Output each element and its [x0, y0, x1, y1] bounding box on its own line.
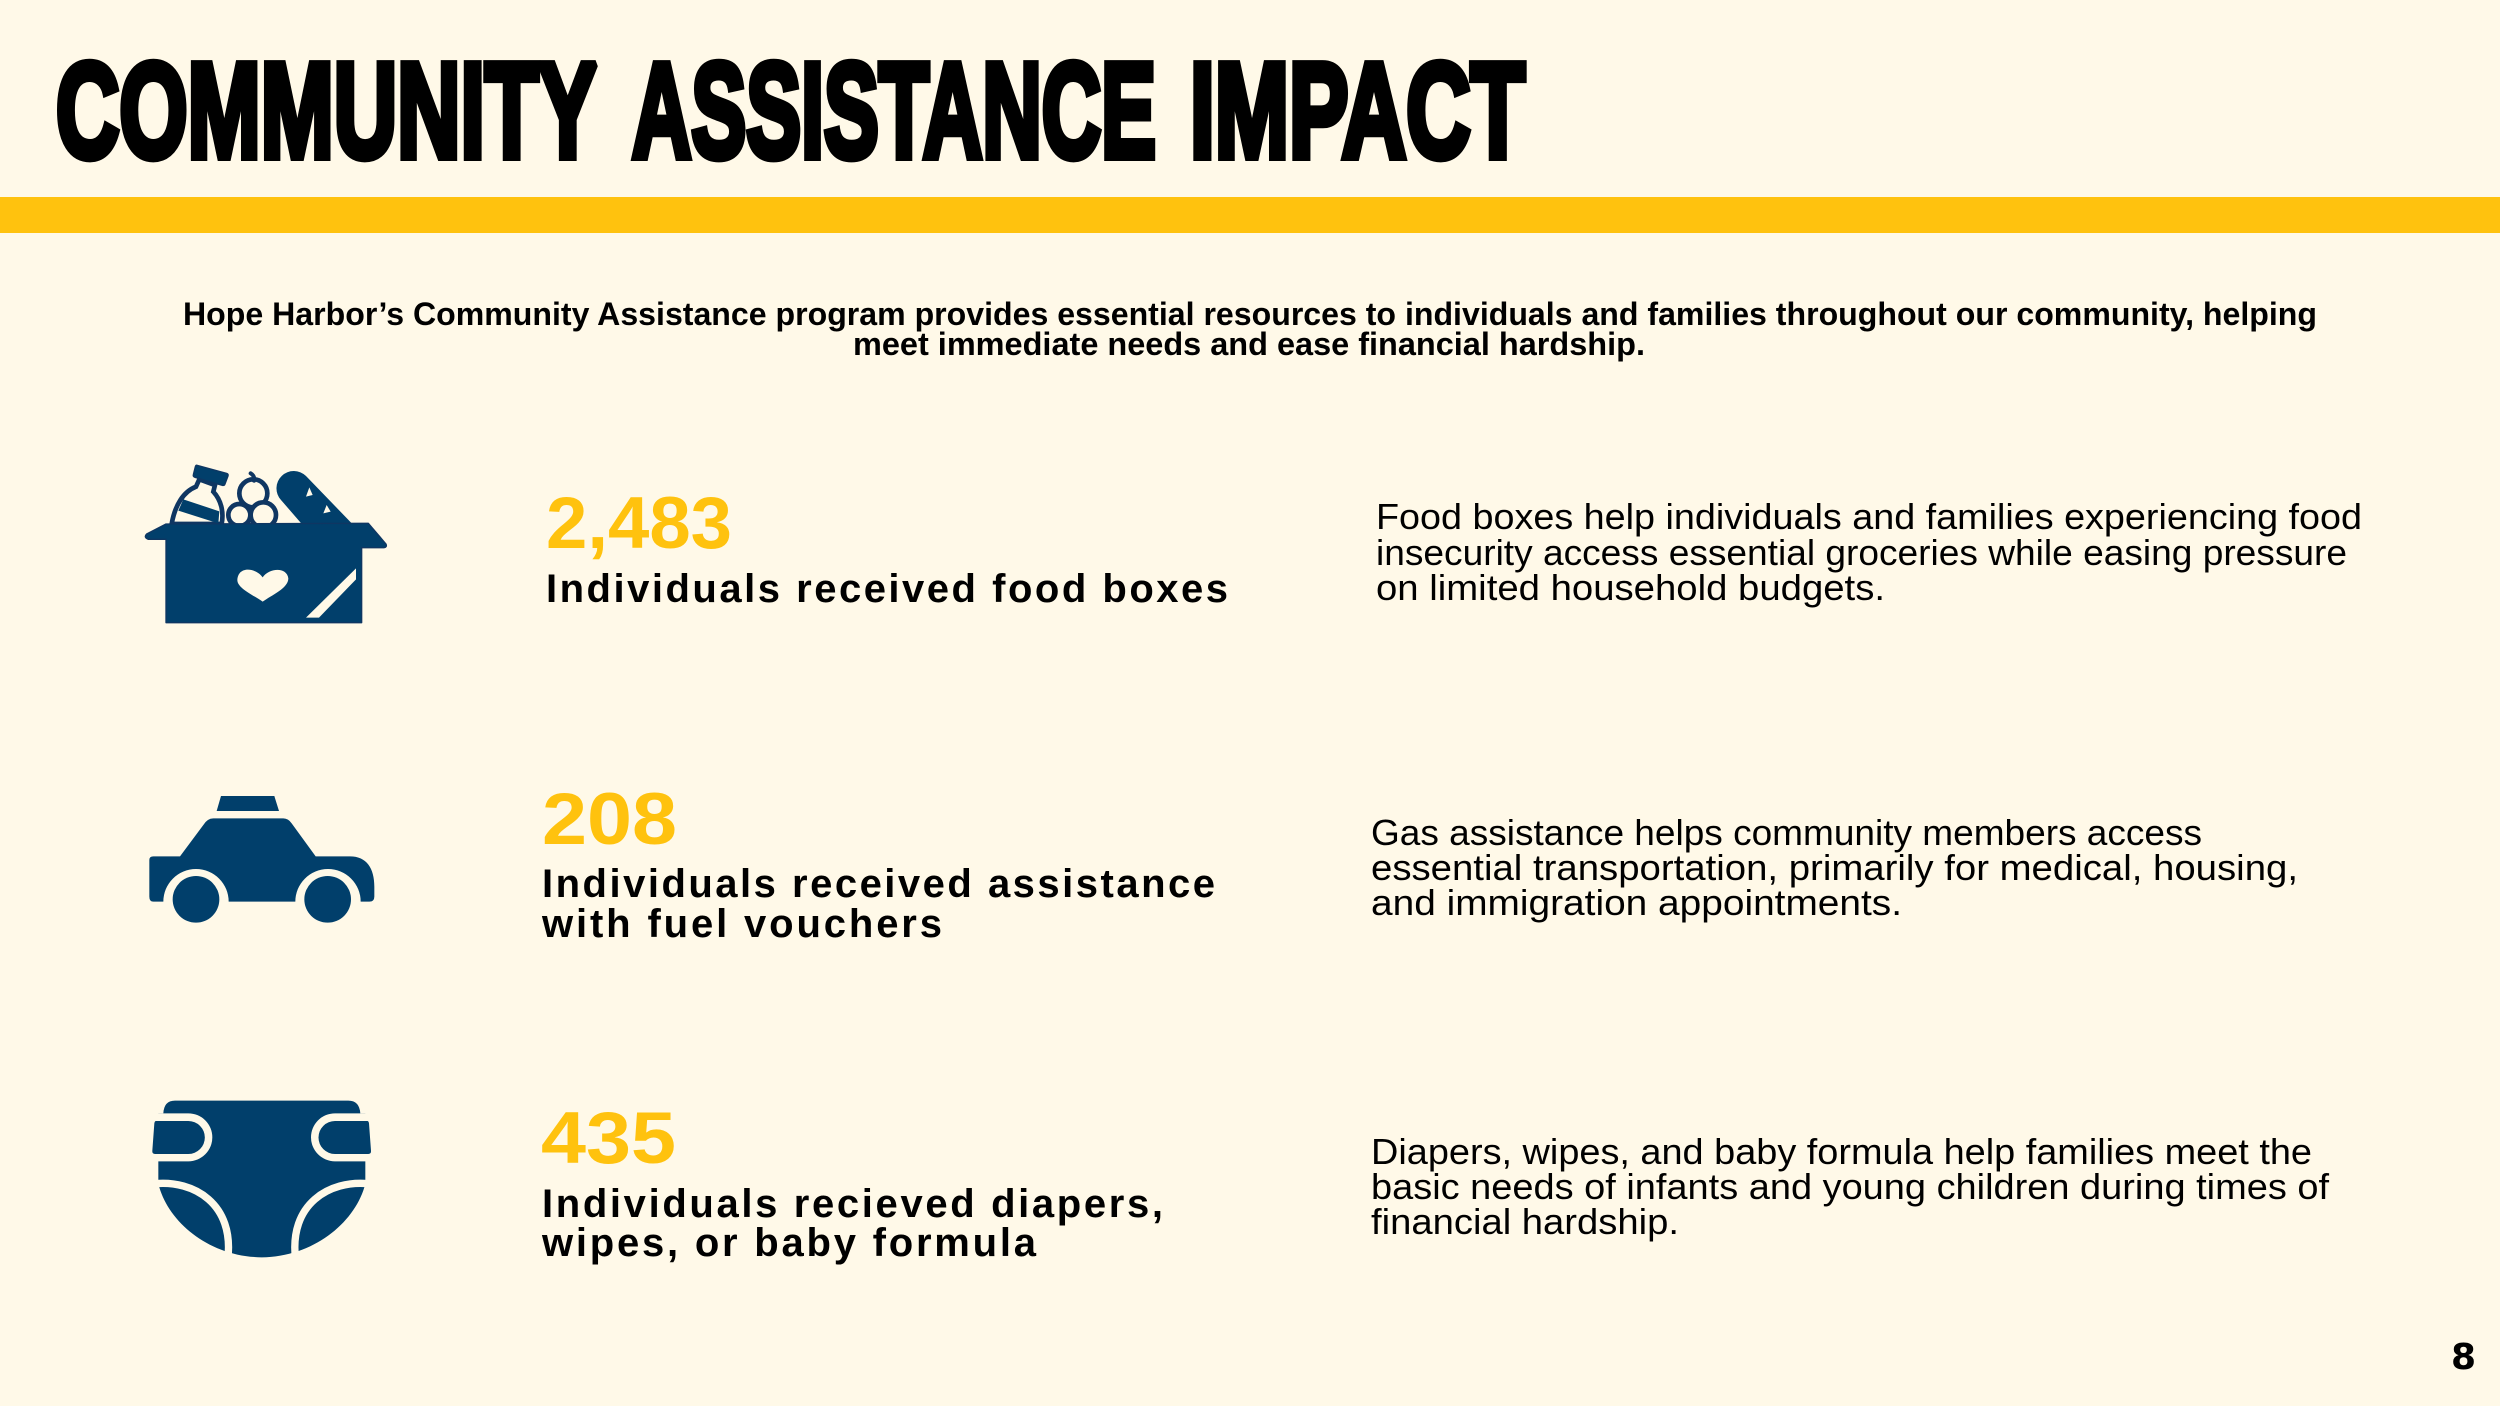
description: financial hardship. — [1371, 1201, 1679, 1242]
description: essential transportation, primarily for medical, housing, — [1371, 847, 2298, 888]
title: COMMUNITY — [56, 35, 597, 186]
description: basic needs of infants and young children during times of — [1371, 1166, 2330, 1207]
description — [1371, 812, 2298, 923]
stat: 208: 208 — [542, 779, 677, 860]
intro text: Hope Harbor’s Community Assistance program provides essential resources to individuals and families throughout our community, helping — [183, 296, 2317, 332]
intro text — [183, 296, 2317, 362]
description: on limited household budgets. — [1376, 567, 1885, 608]
stat label: wipes, or baby formula — [541, 1221, 1037, 1265]
stat label: Individuals received assistance — [542, 862, 1215, 906]
panel: food boxes row — [145, 465, 2362, 623]
description: Food boxes help individuals and families experiencing food — [1376, 496, 2362, 537]
stat label — [541, 1182, 1163, 1265]
description: insecurity access essential groceries while easing pressure — [1376, 532, 2347, 573]
description — [1376, 496, 2362, 608]
icon: car — [149, 796, 374, 923]
yellow header bar — [0, 197, 2500, 233]
description: Gas assistance helps community members access — [1371, 812, 2202, 853]
icon: diaper — [150, 1101, 373, 1260]
title — [56, 35, 1525, 186]
stat label: Individuals recieved diapers, — [542, 1182, 1163, 1226]
page number: 8 — [2451, 1337, 2476, 1378]
title: IMPACT — [1190, 35, 1525, 186]
description — [1371, 1131, 2330, 1242]
panel: diapers row — [150, 1098, 2330, 1265]
title: ASSISTANCE — [632, 35, 1156, 186]
intro text: meet immediate needs and ease financial hardship. — [853, 326, 1645, 362]
description: and immigration appointments. — [1371, 882, 1902, 923]
stat: 435: 435 — [541, 1098, 676, 1179]
stat label — [541, 862, 1215, 946]
stat: 2,483: 2,483 — [546, 483, 732, 564]
description: Diapers, wipes, and baby formula help families meet the — [1371, 1131, 2312, 1172]
stat label: Individuals received food boxes — [546, 567, 1228, 611]
icon: food box — [145, 465, 386, 623]
panel: fuel vouchers row — [149, 779, 2298, 946]
stat label: with fuel vouchers — [541, 902, 942, 946]
